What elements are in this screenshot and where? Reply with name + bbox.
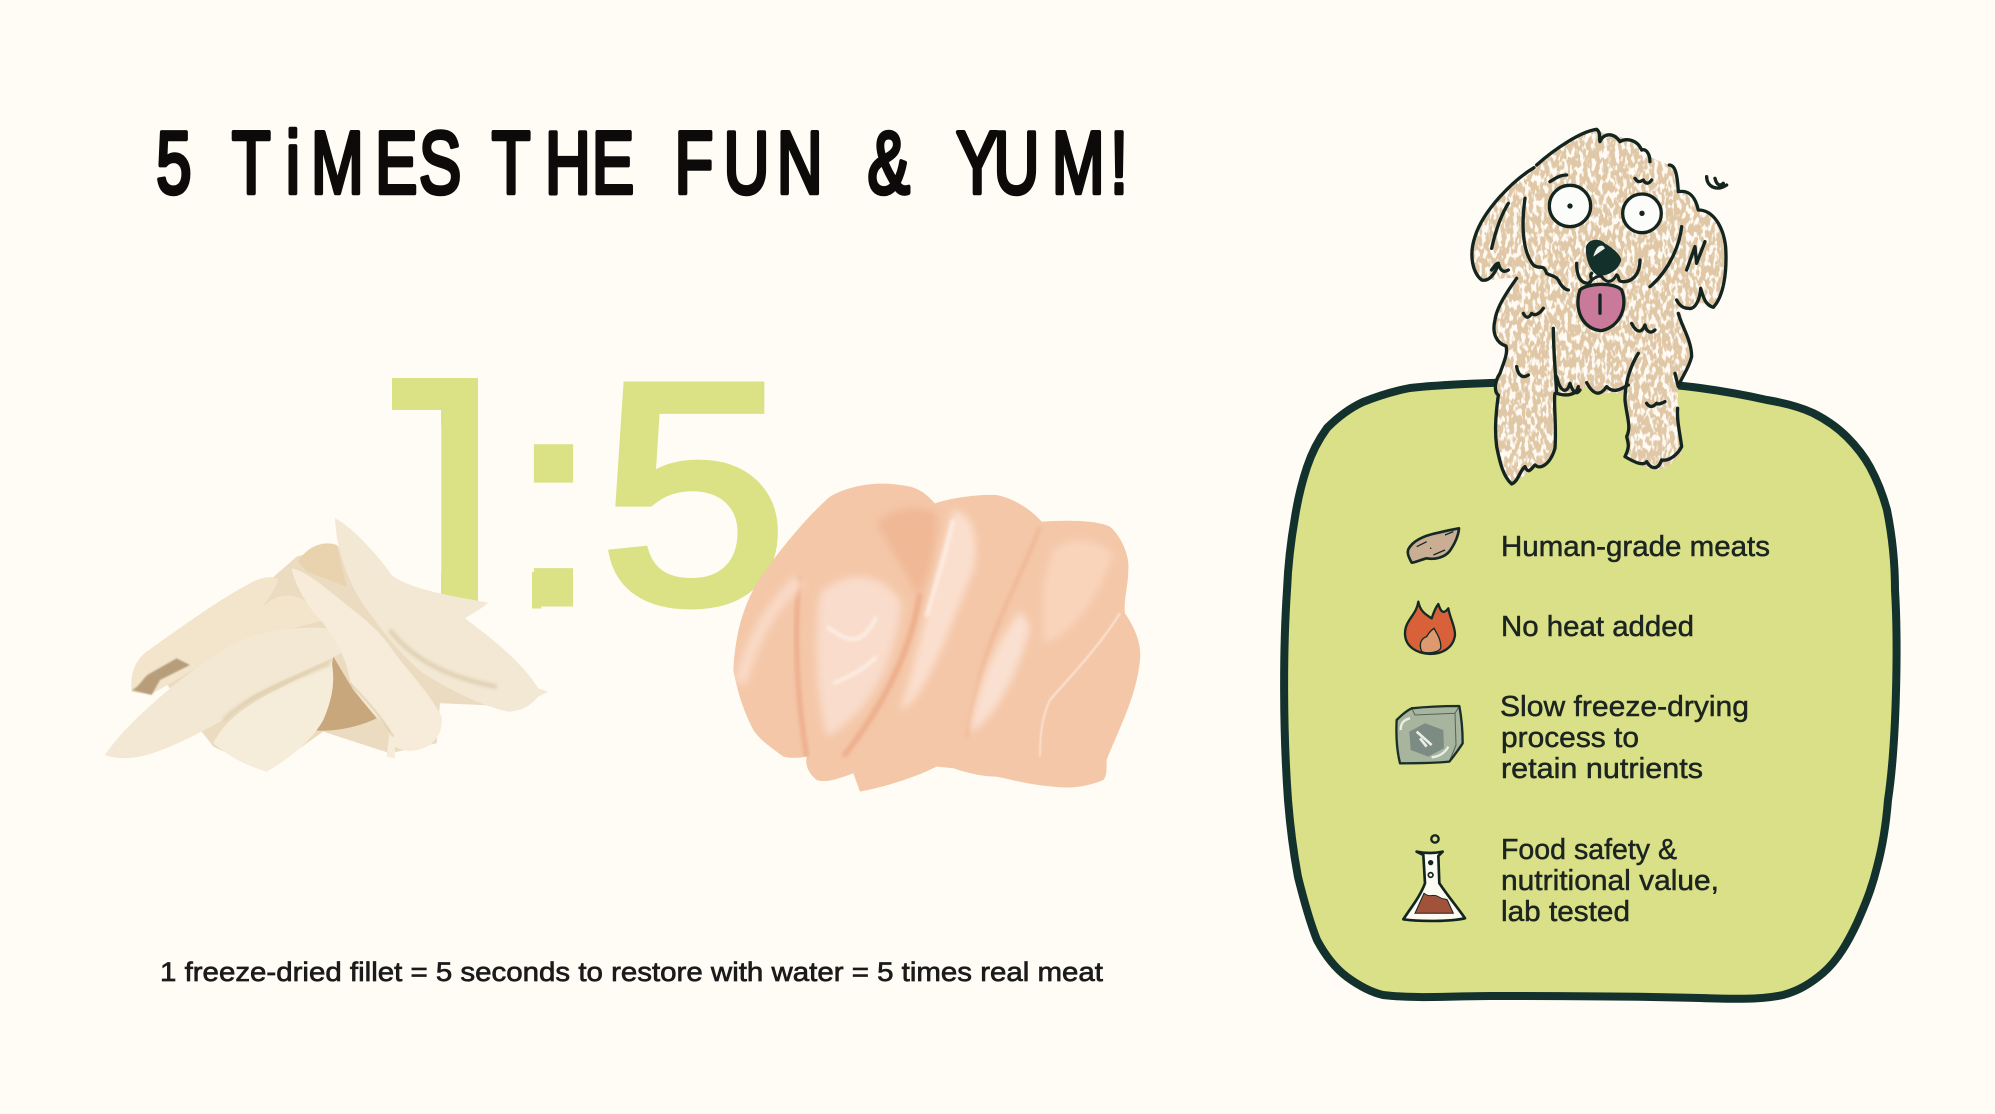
dog nose bbox=[1586, 240, 1621, 276]
label: slow freeze-drying: retain nutrients bbox=[1501, 753, 1703, 785]
dog tongue bbox=[1578, 284, 1624, 331]
dog fur body bbox=[1472, 130, 1725, 483]
label: human-grade meats: Human-grade meats bbox=[1501, 531, 1770, 563]
ratio number 1:5 bbox=[392, 378, 778, 610]
label: food safety: Food safety & bbox=[1501, 834, 1677, 866]
ratio number 1:5: 1 bbox=[364, 318, 551, 669]
ratio number 1:5: 5 bbox=[600, 318, 787, 669]
photo: rehydrated raw chicken bbox=[733, 484, 1140, 792]
icon: meat bbox=[1408, 528, 1459, 563]
label: slow freeze-drying: process to bbox=[1501, 722, 1639, 754]
label: slow freeze-drying: Slow freeze-drying bbox=[1500, 691, 1749, 723]
label: no heat added: No heat added bbox=[1501, 611, 1694, 643]
ratio number 1:5: : bbox=[510, 339, 597, 664]
dog eyes bbox=[1549, 185, 1661, 233]
label: food safety bbox=[1501, 834, 1719, 928]
icon: flame bbox=[1405, 602, 1455, 654]
photo: freeze-dried chicken fillets bbox=[105, 518, 548, 772]
infographic canvas bbox=[105, 126, 1901, 1003]
illustration: scruffy dog peeking over panel bbox=[1472, 129, 1727, 484]
title: 5 TiMES THE FUN & YUM! bbox=[156, 115, 1128, 213]
icon: lab flask bbox=[1403, 835, 1465, 921]
label: food safety: lab tested bbox=[1501, 896, 1630, 928]
icon: ice cube bbox=[1396, 706, 1463, 763]
list: panel features bbox=[1396, 528, 1770, 928]
label: food safety: nutritional value, bbox=[1501, 865, 1719, 897]
panel: benefits card bbox=[1284, 382, 1897, 999]
dog outline bbox=[1472, 129, 1727, 484]
label: slow freeze-drying bbox=[1500, 691, 1749, 785]
caption: ratio explanation: 1 freeze-dried fillet = 5 seconds to restore with water = 5 times real meat bbox=[160, 957, 1104, 987]
